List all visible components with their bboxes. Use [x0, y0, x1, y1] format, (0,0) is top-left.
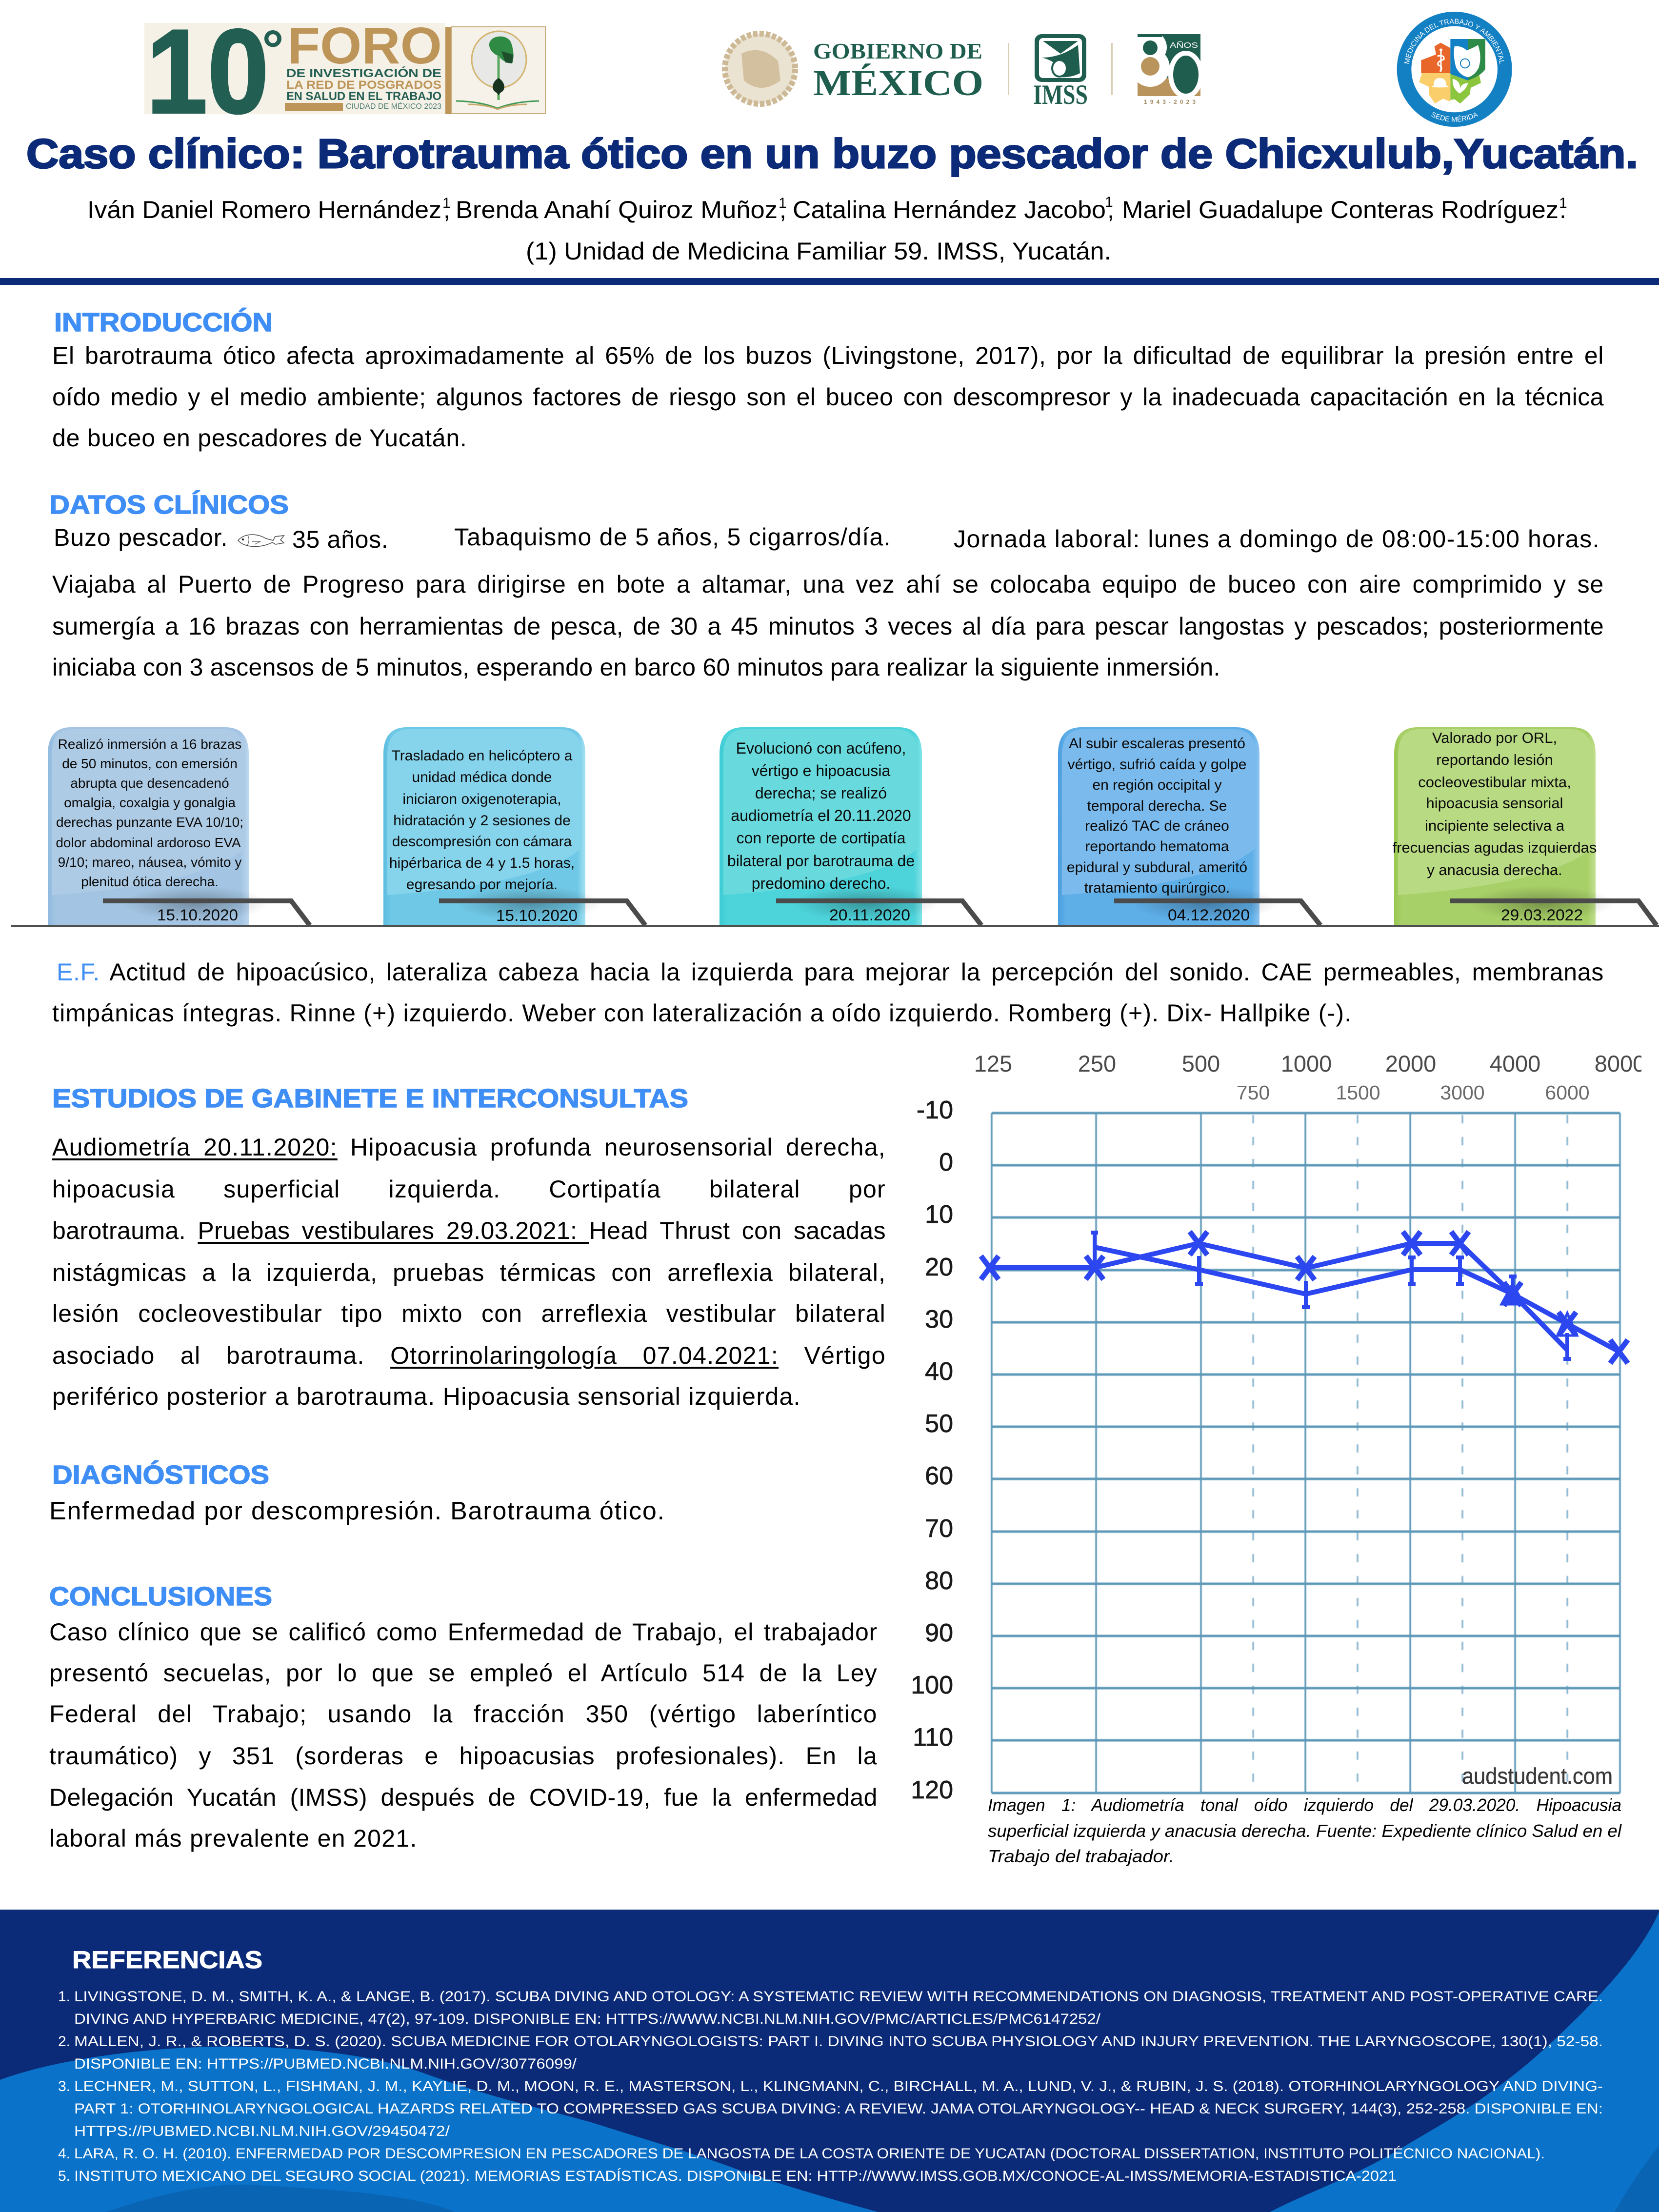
caption: imagen 1: Trabajo del trabajador.: [988, 1846, 1174, 1866]
logo: Gobierno de México, IMSS, 80 años: [722, 31, 1200, 110]
timeline card 29.03.2022: Valorado por ORL,: [1432, 729, 1557, 746]
heading: introducción: INTRODUCCIÓN: [54, 308, 273, 337]
chart: eje de frecuencias: 750: [1237, 1081, 1270, 1104]
text: conclusiones: presentó secuelas, por lo que se empleó el Artículo 514 de la Ley: [49, 1659, 878, 1687]
timeline card 20.11.2020: con reporte de cortipatía: [737, 829, 906, 847]
heading: diagnósticos: DIAGNÓSTICOS: [52, 1460, 269, 1490]
text: exploración física: [52, 957, 1604, 1031]
authors: Iván Daniel Romero Hernández: [87, 196, 441, 223]
timeline card 15.10.2020: plenitud ótica derecha.: [81, 874, 219, 889]
chart: eje de decibeles: 30: [925, 1305, 953, 1334]
timeline card 15.10.2020 traslado: hipérbarica de 4 y 1.5 horas,: [389, 855, 575, 871]
logo: 10 Foro de investigación: [144, 4, 546, 138]
logo: Gobierno de México, IMSS, 80 años: MÉXICO: [813, 63, 983, 103]
timeline card 15.10.2020 traslado: descompresión con cámara: [392, 834, 572, 850]
text: lista de referencias: 4.: [58, 2146, 70, 2162]
chart: eje de decibeles: 120: [911, 1776, 953, 1804]
chart: eje de frecuencias: 500: [1182, 1051, 1220, 1076]
timeline card 20.11.2020: predomino derecho.: [752, 875, 890, 892]
text: lista de referencias: MALLEN, J. R., & ROBERTS, D. S. (2020). SCUBA MEDICINE FOR OTOLARYNGOLOGISTS: PART I. DIVING INTO SCUBA PHYSIOLOGY AND INJURY PREVENTION. THE LARYNGOSCOPE, 130(1), 52-58.: [74, 2033, 1603, 2050]
timeline card 04.12.2020: realizó TAC de cráneo: [1085, 818, 1229, 834]
text: historia laboral: [52, 571, 1604, 681]
timeline card 29.03.2022: incipiente selectiva a: [1425, 817, 1565, 834]
chart: eje de frecuencias: 8000: [1595, 1051, 1645, 1076]
logo: Medicina del Trabajo y Ambiental: SEDE MÉRIDA: [1431, 112, 1478, 122]
chart: eje de frecuencias: 1500: [1336, 1081, 1380, 1104]
logo: 10 Foro de investigación: FORO: [287, 17, 442, 75]
logo: 10 Foro de investigación: EN SALUD EN EL TRABAJO: [286, 90, 441, 103]
chart: audiometría tonal: [917, 1044, 1641, 1805]
text: diagnósticos: Enfermedad por descompresión. Barotrauma ótico.: [49, 1497, 664, 1525]
timeline card 15.10.2020: de 50 minutos, con emersión: [62, 756, 238, 771]
text: estudios de gabinete: lesión cocleovestibular tipo mixto con arreflexia vestibular bilateral: [52, 1300, 886, 1327]
timeline card 04.12.2020: reportando hematoma: [1085, 838, 1229, 855]
authors: Mariel Guadalupe Conteras Rodríguez: [1122, 196, 1559, 223]
affiliation: (1) Unidad de Medicina Familiar 59. IMSS, Yucatán.: [526, 238, 1111, 265]
logo: Gobierno de México, IMSS, 80 años: 1943-2023: [1144, 99, 1196, 105]
logo: 10 Foro de investigación: DE INVESTIGACIÓN DE: [286, 66, 441, 80]
text: estudios de gabinete: periférico posterior a barotrauma. Hipoacusia sensorial izquierda.: [52, 1383, 801, 1410]
chart: eje de decibeles: 90: [925, 1619, 953, 1647]
text: lista de referencias: LARA, R. O. H. (2010). ENFERMEDAD POR DESCOMPRESION EN PESCADORES DE LANGOSTA DE LA COSTA ORIENTE DE YUCATAN (DOCTORAL DISSERTATION, INSTITUTO POLITÉCNICO NACIONAL).: [74, 2146, 1545, 2162]
caption: imagen 1: [988, 1795, 1621, 1868]
timeline card 04.12.2020: tratamiento quirúrgico.: [1084, 880, 1230, 896]
text: introducción: oído medio y el medio ambiente; algunos factores de riesgo son el buceo con descompresor y la inadecuada capacitación en la técnica: [52, 383, 1604, 411]
chart: eje de decibeles: 60: [925, 1462, 953, 1490]
timeline card 29.03.2022: [1394, 727, 1658, 927]
timeline card 15.10.2020 traslado: iniciaron oxigenoterapia,: [402, 791, 561, 807]
timeline card 29.03.2022: y anacusia derecha.: [1427, 861, 1562, 878]
text: datos clínicos row: Tabaquismo de 5 años, 5 cigarros/día.: [454, 523, 891, 551]
timeline card 04.12.2020: vértigo, sufrió caída y golpe: [1068, 757, 1246, 773]
text: conclusiones: traumático) y 351 (sorderas e hipoacusias profesionales). En la: [49, 1742, 878, 1770]
timeline card 04.12.2020: temporal derecha. Se: [1087, 798, 1227, 814]
authors: Catalina Hernández Jacobo: [793, 196, 1106, 223]
timeline card 29.03.2022: hipoacusia sensorial: [1426, 795, 1563, 812]
timeline card 15.10.2020 traslado: hidratación y 2 sesiones de: [393, 813, 571, 829]
timeline card 29.03.2022: 29.03.2022: [1501, 906, 1583, 924]
chart: eje de frecuencias: 2000: [1385, 1051, 1436, 1076]
authors: Brenda Anahí Quiroz Muñoz: [456, 196, 778, 223]
text: datos clínicos row: Jornada laboral: lunes a domingo de 08:00-15:00 horas.: [954, 525, 1600, 553]
timeline card 20.11.2020: Evolucionó con acúfeno,: [736, 739, 906, 757]
timeline card 15.10.2020 traslado: unidad médica donde: [412, 769, 552, 785]
timeline card 04.12.2020: 04.12.2020: [1168, 906, 1250, 924]
text: conclusiones: Caso clínico que se calificó como Enfermedad de Trabajo, el trabajador: [49, 1618, 878, 1646]
timeline card 04.12.2020: epidural y subdural, ameritó: [1067, 859, 1247, 876]
chart: eje de decibeles: 40: [925, 1357, 953, 1386]
logo: 10 Foro de investigación: LA RED DE POSGRADOS: [286, 79, 441, 92]
chart: eje de decibeles: 10: [925, 1200, 953, 1229]
timeline card 04.12.2020: [1058, 727, 1322, 925]
text: lista de referencias: HTTPS://PUBMED.NCBI.NLM.NIH.GOV/29450472/: [74, 2123, 450, 2139]
timeline card 20.11.2020: derecha; se realizó: [755, 784, 887, 802]
timeline card 20.11.2020: bilateral por barotrauma de: [727, 852, 915, 870]
caption: imagen 1: Imagen 1: Audiometría tonal oído izquierdo del 29.03.2020. Hipoacusia: [988, 1795, 1621, 1815]
text: lista de referencias: LIVINGSTONE, D. M., SMITH, K. A., & LANGE, B. (2017). SCUBA DIVING AND OTOLOGY: A SYSTEMATIC REVIEW WITH RECOMMENDATIONS ON DIAGNOSIS, TREATMENT AND POST-OPERATIVE CARE.: [74, 1989, 1603, 2005]
chart: eje de frecuencias: 125: [974, 1051, 1012, 1076]
text: historia laboral: iniciaba con 3 ascensos de 5 minutos, esperando en barco 60 minutos para realizar la siguiente inmersión.: [52, 654, 1220, 681]
logo: 10 Foro de investigación: 10: [146, 4, 269, 138]
text: estudios de gabinete: barotrauma. Pruebas vestibulares 29.03.2021: Head Thrust con sacadas: [52, 1217, 886, 1244]
text: datos clínicos row: [54, 523, 1600, 553]
chart: eje de frecuencias: 6000: [1545, 1081, 1590, 1104]
timeline card 15.10.2020: Realizó inmersión a 16 brazas: [58, 737, 241, 752]
timeline card 29.03.2022: reportando lesión: [1436, 751, 1553, 768]
header divider bar: [0, 278, 1659, 285]
logo: 10 Foro de investigación: °: [262, 19, 284, 80]
icon: fish: [238, 534, 285, 547]
heading: datos clínicos: DATOS CLÍNICOS: [49, 490, 289, 519]
logo: Gobierno de México, IMSS, 80 años: GOBIERNO DE: [813, 39, 982, 63]
chart: marca de agua: audstudent.com: [1462, 1763, 1613, 1789]
text: lista de referencias: 1.: [58, 1989, 70, 2005]
timeline card 15.10.2020: [48, 727, 312, 925]
timeline card 04.12.2020: en región occipital y: [1092, 777, 1222, 793]
chart: eje de decibeles: -10: [917, 1096, 953, 1124]
timeline card 15.10.2020: derechas punzante EVA 10/10;: [56, 815, 243, 830]
chart: curvas del oído izquierdo: [981, 1232, 1628, 1363]
timeline card 15.10.2020: omalgia, coxalgia y gonalgia: [64, 795, 236, 810]
logo: Gobierno de México, IMSS, 80 años: AÑOS: [1170, 40, 1198, 50]
text: datos clínicos row: 35 años.: [292, 526, 388, 553]
chart: eje de decibeles: 50: [925, 1410, 953, 1438]
chart: eje de frecuencias: 4000: [1490, 1051, 1540, 1076]
panel: referencias: [0, 1910, 1659, 2212]
text: estudios de gabinete: asociado al barotrauma. Otorrinolaringología 07.04.2021: Vértigo: [52, 1342, 886, 1369]
text: lista de referencias: PART 1: OTORHINOLARYNGOLOGICAL HAZARDS RELATED TO COMPRESSED GAS SCUBA DIVING: A REVIEW. JAMA OTOLARYNGOLOGY-- HEAD & NECK SURGERY, 144(3), 252-258. DISPONIBLE EN:: [74, 2101, 1603, 2117]
authors: ,: [1107, 196, 1114, 223]
text: conclusiones: Delegación Yucatán (IMSS) después de COVID-19, fue la enfermedad: [49, 1784, 878, 1811]
chart: eje de frecuencias: 1000: [1281, 1051, 1332, 1076]
text: introducción: El barotrauma ótico afecta aproximadamente al 65% de los buzos (Livingstone, 2017), por la dificultad de equilibrar la presión entre el: [52, 342, 1604, 369]
text: lista de referencias: 5.: [58, 2168, 70, 2184]
text: introducción: de buceo en pescadores de Yucatán.: [52, 424, 467, 452]
text: datos clínicos row: Buzo pescador.: [54, 524, 228, 551]
chart: eje de frecuencias: 250: [1078, 1051, 1116, 1076]
chart: eje de decibeles: 110: [913, 1723, 953, 1752]
chart: eje de decibeles: [911, 1096, 953, 1804]
text: lista de referencias: LECHNER, M., SUTTON, L., FISHMAN, J. M., KAYLIE, D. M., MOON, R. E., MASTERSON, L., KLINGMANN, C., BIRCHALL, M. A., LUND, V. J., & RUBIN, J. S. (2018). OTORHINOLARYNGOLOGY AND DIVING-: [74, 2078, 1603, 2094]
timeline card 04.12.2020: Al subir escaleras presentó: [1069, 736, 1245, 752]
timeline card 15.10.2020: 15.10.2020: [157, 906, 238, 924]
text: historia laboral: Viajaba al Puerto de Progreso para dirigirse en bote a altamar, una vez ahí se colocaba equipo de buceo con aire comprimido y se: [52, 571, 1604, 598]
timeline card 15.10.2020 traslado: egresando por mejoría.: [406, 877, 558, 893]
authors: ,: [443, 196, 450, 223]
timeline card 15.10.2020 traslado: [383, 727, 647, 925]
authors: 1: [1105, 194, 1113, 210]
timeline baseline: [11, 925, 1659, 927]
chart: eje de decibeles: 0: [939, 1148, 953, 1176]
text: estudios de gabinete: hipoacusia superficial izquierda. Cortipatía bilateral por: [52, 1176, 886, 1203]
text: lista de referencias: INSTITUTO MEXICANO DEL SEGURO SOCIAL (2021). MEMORIAS ESTADÍSTICAS. DISPONIBLE EN: HTTP://WWW.IMSS.GOB.MX/CONOCE-AL-IMSS/MEMORIA-ESTADISTICA-2021: [74, 2168, 1397, 2184]
chart: eje de decibeles: 100: [911, 1671, 953, 1699]
caption: imagen 1: superficial izquierda y anacusia derecha. Fuente: Expediente clínico Salud en el: [988, 1821, 1622, 1841]
chart: eje de frecuencias: [974, 1049, 1659, 1104]
authors: .: [1559, 196, 1566, 223]
timeline card 15.10.2020: 9/10; mareo, náusea, vómito y: [58, 855, 241, 870]
text: conclusiones: [49, 1617, 878, 1854]
text: lista de referencias: 3.: [58, 2078, 70, 2094]
timeline card 15.10.2020: abrupta que desencadenó: [70, 776, 229, 791]
text: estudios de gabinete: nistágmicas a la izquierda, pruebas térmicas con arreflexia bilateral,: [52, 1259, 886, 1286]
timeline card 20.11.2020: vértigo e hipoacusia: [752, 762, 891, 779]
text: lista de referencias: DISPONIBLE EN: HTTPS://PUBMED.NCBI.NLM.NIH.GOV/30776099/: [74, 2056, 577, 2072]
timeline card 29.03.2022: frecuencias agudas izquierdas: [1393, 839, 1597, 856]
chart: eje de decibeles: 70: [925, 1515, 953, 1543]
text: estudios de gabinete: [52, 1133, 886, 1413]
text: lista de referencias: 2.: [58, 2033, 70, 2050]
logo: Medicina del Trabajo y Ambiental: MEDICINA DEL TRABAJO Y AMBIENTAL: [1404, 19, 1504, 64]
authors: ,: [780, 196, 786, 223]
timeline card 15.10.2020: dolor abdominal ardoroso EVA: [56, 835, 241, 850]
text: estudios de gabinete: Audiometría 20.11.2020: Hipoacusia profunda neurosensorial derecha,: [52, 1134, 886, 1161]
logo: Gobierno de México, IMSS, 80 años: IMSS: [1033, 80, 1088, 110]
timeline card 20.11.2020: audiometría el 20.11.2020: [731, 807, 911, 824]
authors: 1: [779, 195, 787, 211]
timeline card 15.10.2020 traslado: 15.10.2020: [496, 907, 578, 924]
text: historia laboral: sumergía a 16 brazas con herramientas de pesca, de 30 a 45 minutos 3 veces al día para pescar langostas y pescados; posteriormente: [52, 613, 1604, 640]
heading: referencias: REFERENCIAS: [72, 1946, 262, 1973]
text: introducción: [52, 342, 1604, 452]
text: lista de referencias: [58, 1989, 1603, 2184]
authors: 1: [442, 195, 451, 211]
authors: [87, 194, 1567, 223]
logo: 10 Foro de investigación: CIUDAD DE MÉXICO 2023: [346, 101, 441, 111]
heading: estudios de gabinete: ESTUDIOS DE GABINETE E INTERCONSULTAS: [52, 1084, 688, 1113]
title: Caso clínico: Barotrauma ótico en un buzo pescador de Chicxulub,Yucatán.: [26, 131, 1638, 177]
chart: eje de frecuencias: 3000: [1440, 1081, 1485, 1104]
logo: Medicina del Trabajo y Ambiental: [1397, 12, 1512, 127]
text: exploración física: timpánicas íntegras. Rinne (+) izquierdo. Weber con lateralización a oído izquierdo. Romberg (+). Dix- Hallpike (-).: [52, 999, 1352, 1027]
timeline card 15.10.2020 traslado: Trasladado en helicóptero a: [392, 748, 573, 764]
text: lista de referencias: DIVING AND HYPERBARIC MEDICINE, 47(2), 97-109. DISPONIBLE EN: HTTPS://WWW.NCBI.NLM.NIH.GOV/PMC/ARTICLES/PMC6147252/: [74, 2011, 1101, 2027]
timeline card 29.03.2022: cocleovestibular mixta,: [1418, 774, 1571, 791]
chart: eje de decibeles: 80: [925, 1567, 953, 1595]
text: conclusiones: laboral más prevalente en 2021.: [49, 1825, 418, 1852]
chart: eje de decibeles: 20: [925, 1253, 953, 1281]
text: exploración física: E.F. Actitud de hipoacúsico, lateraliza cabeza hacia la izquierda para mejorar la percepción del sonido. CAE permeables, membranas: [57, 958, 1604, 986]
heading: conclusiones: CONCLUSIONES: [49, 1582, 272, 1611]
timeline card 20.11.2020: [720, 727, 983, 925]
text: conclusiones: Federal del Trabajo; usando la fracción 350 (vértigo laberíntico: [49, 1700, 878, 1728]
timeline card 20.11.2020: 20.11.2020: [829, 906, 910, 924]
authors: 1: [1559, 195, 1567, 211]
